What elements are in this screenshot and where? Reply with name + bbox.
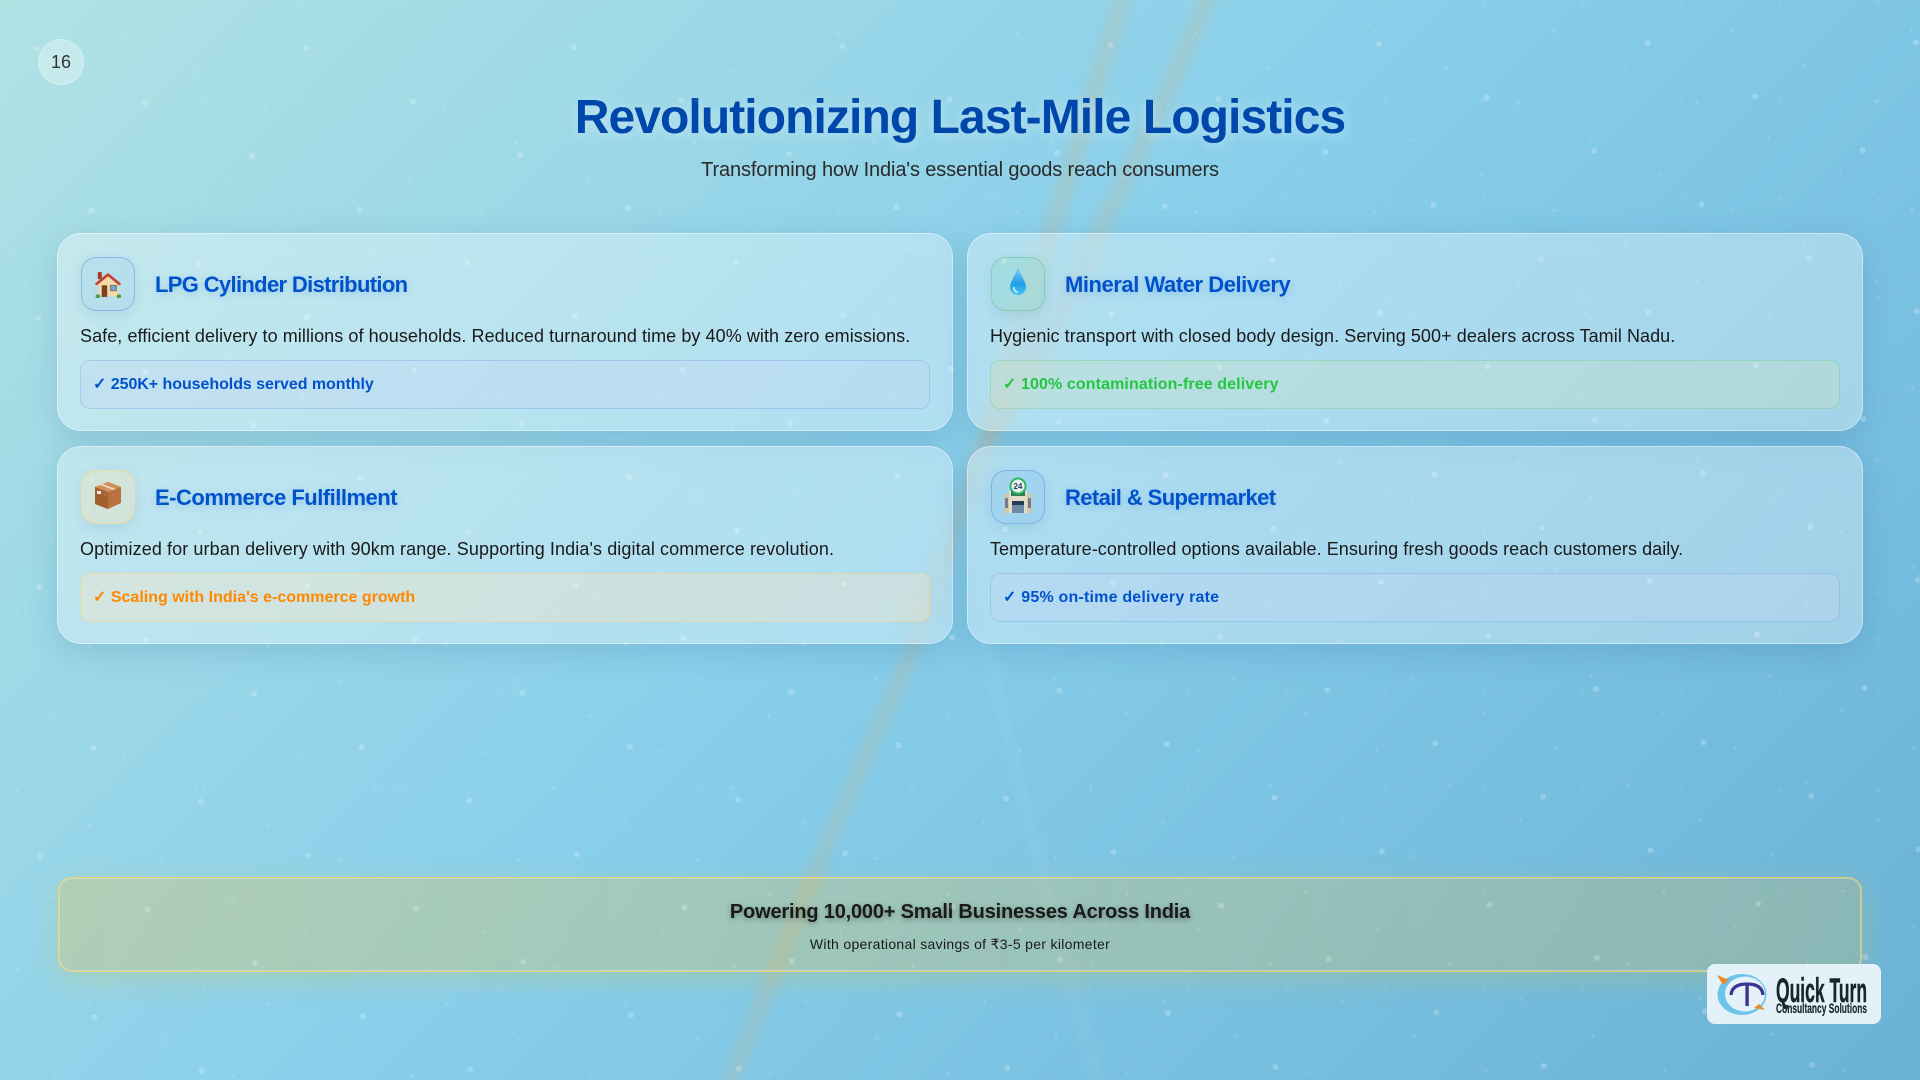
card heading: Mineral Water Delivery — [1065, 272, 1290, 297]
icon: water drop — [991, 257, 1045, 311]
panel: mineral water delivery — [967, 233, 1863, 431]
highlight — [990, 360, 1840, 409]
highlight — [990, 573, 1840, 622]
subtitle: Transforming how India's essential goods reach consumers — [701, 158, 1219, 180]
banner heading: Powering 10,000+ Small Businesses Across India — [730, 901, 1190, 923]
page number badge: 16 — [51, 52, 71, 72]
card description: Temperature-controlled options available. Ensuring fresh goods reach customers daily. — [990, 539, 1683, 559]
highlight: ✓ Scaling with India's e-commerce growth — [93, 589, 415, 606]
highlight: ✓ 250K+ households served monthly — [93, 376, 374, 393]
card heading: E-Commerce Fulfillment — [155, 485, 397, 510]
logo — [1707, 964, 1881, 1024]
card description: Safe, efficient delivery to millions of households. Reduced turnaround time by 40% with zero emissions. — [80, 326, 910, 346]
callout banner — [58, 877, 1862, 972]
highlight: ✓ 100% contamination-free delivery — [1003, 376, 1279, 393]
banner subtext: With operational savings of ₹3-5 per kilometer — [810, 936, 1110, 952]
panel: e-commerce fulfillment — [57, 446, 953, 644]
card heading: Retail & Supermarket — [1065, 485, 1276, 510]
card description: Hygienic transport with closed body design. Serving 500+ dealers across Tamil Nadu. — [990, 326, 1675, 346]
icon: convenience store — [991, 470, 1045, 524]
panel: LPG cylinder distribution — [57, 233, 953, 431]
highlight — [80, 573, 930, 622]
card heading: LPG Cylinder Distribution — [155, 272, 407, 297]
highlight — [80, 360, 930, 409]
icon: house — [81, 257, 135, 311]
title: Revolutionizing Last-Mile Logistics — [575, 91, 1345, 144]
highlight: ✓ 95% on-time delivery rate — [1003, 589, 1219, 606]
card description: Optimized for urban delivery with 90km range. Supporting India's digital commerce revolution. — [80, 539, 834, 559]
logo mark — [1717, 974, 1766, 1015]
icon: package box — [81, 470, 135, 524]
page number badge — [38, 39, 84, 85]
panel: retail and supermarket — [967, 446, 1863, 644]
icon: convenience store: 24 — [1014, 482, 1023, 491]
